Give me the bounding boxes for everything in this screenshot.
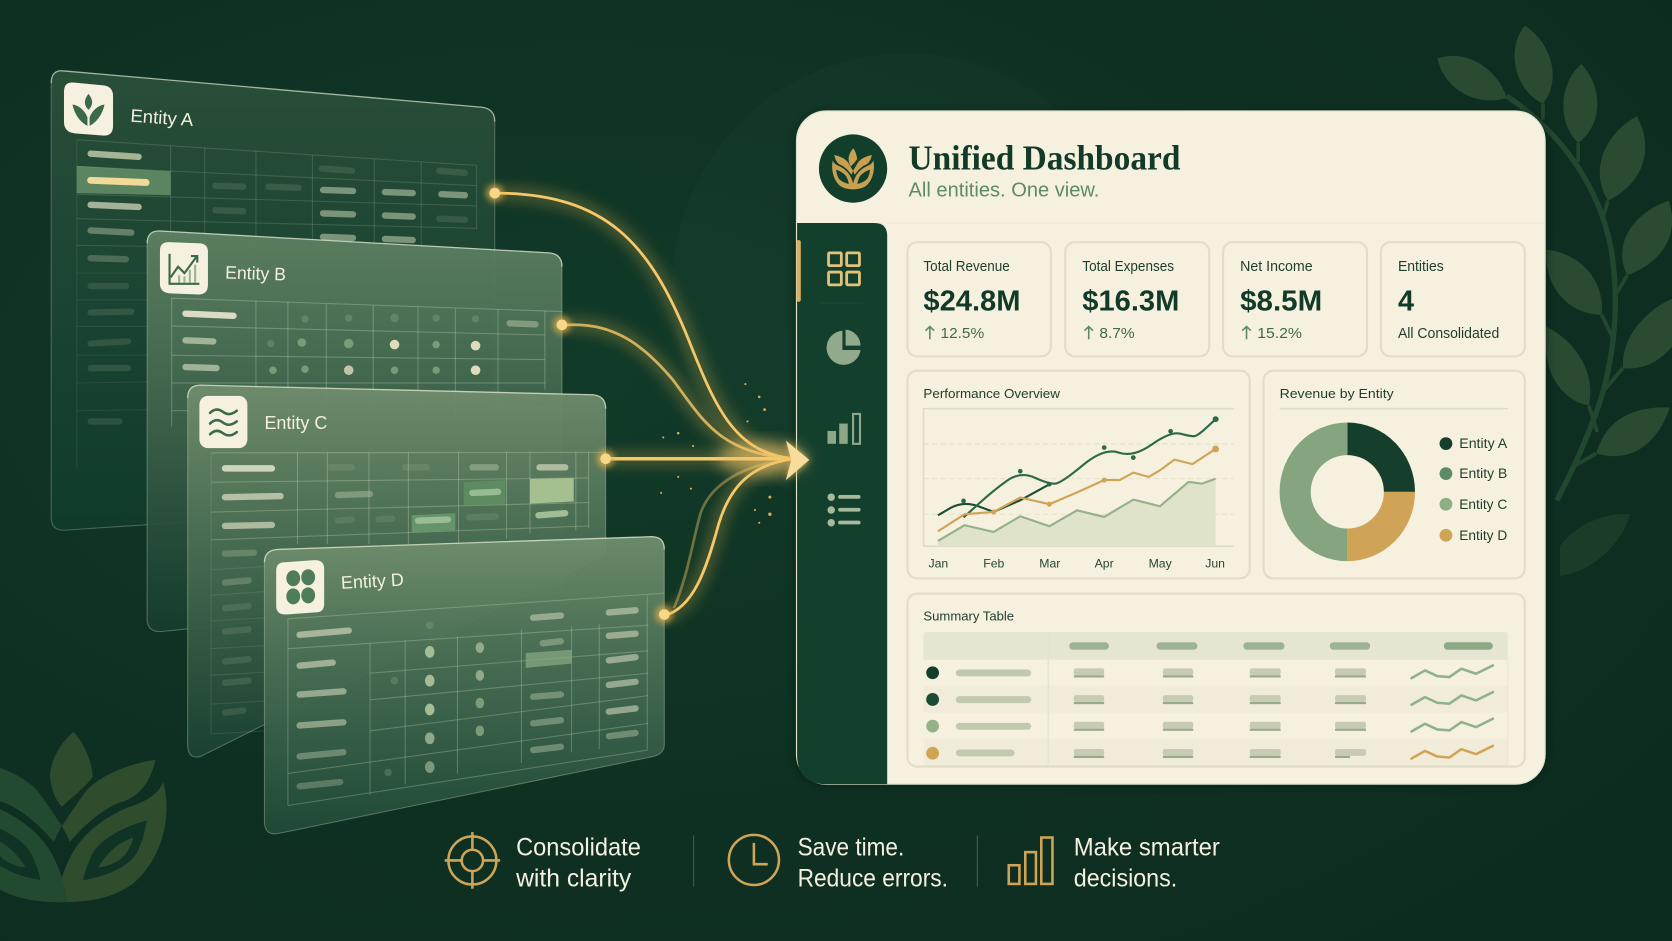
connector arrows converging on dashboard: [486, 185, 809, 623]
panel: Entity D spreadsheet: [264, 537, 664, 834]
decorative leaf mark bottom left: [0, 732, 167, 902]
panel: Entity B spreadsheet: [147, 231, 562, 632]
panel: Entity A spreadsheet: [51, 71, 495, 530]
benefit: consolidate with clarity: Consolidate: [516, 835, 641, 862]
KPI card: Total Expenses: $16.3M: [1082, 285, 1179, 317]
KPI card: Total Revenue: 12.5%: [940, 325, 984, 342]
donut chart: [1280, 422, 1415, 561]
legend: Entity D: [1459, 527, 1507, 543]
legend: Entity C: [1459, 496, 1507, 512]
panel: summary table: [907, 594, 1525, 767]
KPI card: Net Income: Net Income: [1240, 259, 1313, 275]
panel: performance overview chart: Feb: [983, 557, 1005, 571]
benefit: consolidate with clarity: with clarity: [515, 866, 632, 893]
dot matrix: [384, 621, 484, 776]
header pills: [1069, 642, 1493, 650]
KPI card: Net Income: 15.2%: [1257, 325, 1302, 342]
icon: clock: [729, 835, 779, 885]
benefit: save time, reduce errors: [729, 835, 948, 893]
legend: Entity B: [1459, 465, 1507, 481]
icon: Entity C waves: [199, 396, 247, 448]
KPI card: Total Revenue: Total Revenue: [923, 259, 1010, 275]
icon: Entity B chart: [160, 242, 208, 294]
subtitle: All entities. One view.: [909, 179, 1099, 201]
benefit: make smarter decisions: [1009, 835, 1220, 893]
KPI card: Total Expenses: 8.7%: [1099, 325, 1135, 342]
benefit: save time, reduce errors: Save time.: [798, 835, 904, 862]
panel: performance overview chart: Apr: [1095, 557, 1114, 571]
KPI card: Total Expenses: [1065, 242, 1209, 356]
area series: [938, 479, 1216, 546]
panel: Entity C spreadsheet: [188, 385, 606, 757]
panel label: Entity C: Entity C: [264, 413, 327, 433]
logo: [819, 134, 887, 203]
legend: [1440, 435, 1508, 543]
panel: summary table: Summary Table: [923, 608, 1014, 623]
icon: Entity A leaf: [64, 82, 113, 136]
benefit: save time, reduce errors: Reduce errors.: [798, 866, 948, 893]
KPI card: Entities: All Consolidated: [1398, 326, 1499, 342]
icon: bar chart outline: [1009, 838, 1052, 884]
icon: Entity D dots: [276, 560, 324, 615]
KPI card: Entities: [1381, 242, 1525, 356]
KPI card: Net Income: [1223, 242, 1367, 356]
dot matrix: [267, 314, 480, 375]
icon: pie: [827, 330, 861, 365]
title: Unified Dashboard: [909, 139, 1181, 178]
KPI card: Total Expenses: Total Expenses: [1082, 259, 1174, 275]
icon: arrow head: [786, 441, 809, 480]
icon: grid: [829, 253, 859, 285]
KPI card: Net Income: $8.5M: [1240, 285, 1322, 317]
panel: revenue by entity donut: [1264, 371, 1525, 578]
benefit: consolidate with clarity: [445, 832, 641, 893]
KPI card: Entities: 4: [1398, 285, 1414, 317]
row: Entity D: [926, 746, 1493, 760]
panel: performance overview chart: Jan: [928, 557, 948, 571]
benefit: make smarter decisions: decisions.: [1074, 866, 1177, 893]
icon: bars: [827, 414, 860, 444]
panel: performance overview chart: May: [1149, 557, 1173, 571]
dark series: [938, 419, 1216, 517]
icon: target: [445, 832, 500, 889]
decorative branch top right: [1437, 26, 1672, 576]
gold series: [938, 449, 1216, 531]
row: Entity A: [926, 665, 1493, 679]
panel: performance overview chart: Performance Overview: [923, 386, 1060, 401]
KPI card: Total Revenue: [907, 242, 1051, 356]
benefit: make smarter decisions: Make smarter: [1074, 835, 1220, 862]
panel: performance overview chart: [907, 371, 1250, 578]
panel: performance overview chart: Jun: [1205, 557, 1225, 571]
panel label: Entity B: Entity B: [225, 262, 286, 285]
panel: revenue by entity donut: Revenue by Entity: [1280, 386, 1394, 401]
row: Entity B: [926, 692, 1493, 706]
KPI card: Entities: Entities: [1398, 259, 1444, 275]
icon: list: [827, 493, 861, 527]
panel label: Entity A: Entity A: [130, 106, 195, 130]
row: Entity C: [926, 719, 1493, 733]
KPI card: Total Revenue: $24.8M: [923, 285, 1020, 317]
panel label: Entity D: Entity D: [340, 570, 404, 593]
panel: performance overview chart: Mar: [1039, 557, 1060, 571]
legend: Entity A: [1459, 435, 1508, 451]
sidebar: [797, 223, 887, 784]
panel: unified dashboard: [793, 111, 1548, 787]
